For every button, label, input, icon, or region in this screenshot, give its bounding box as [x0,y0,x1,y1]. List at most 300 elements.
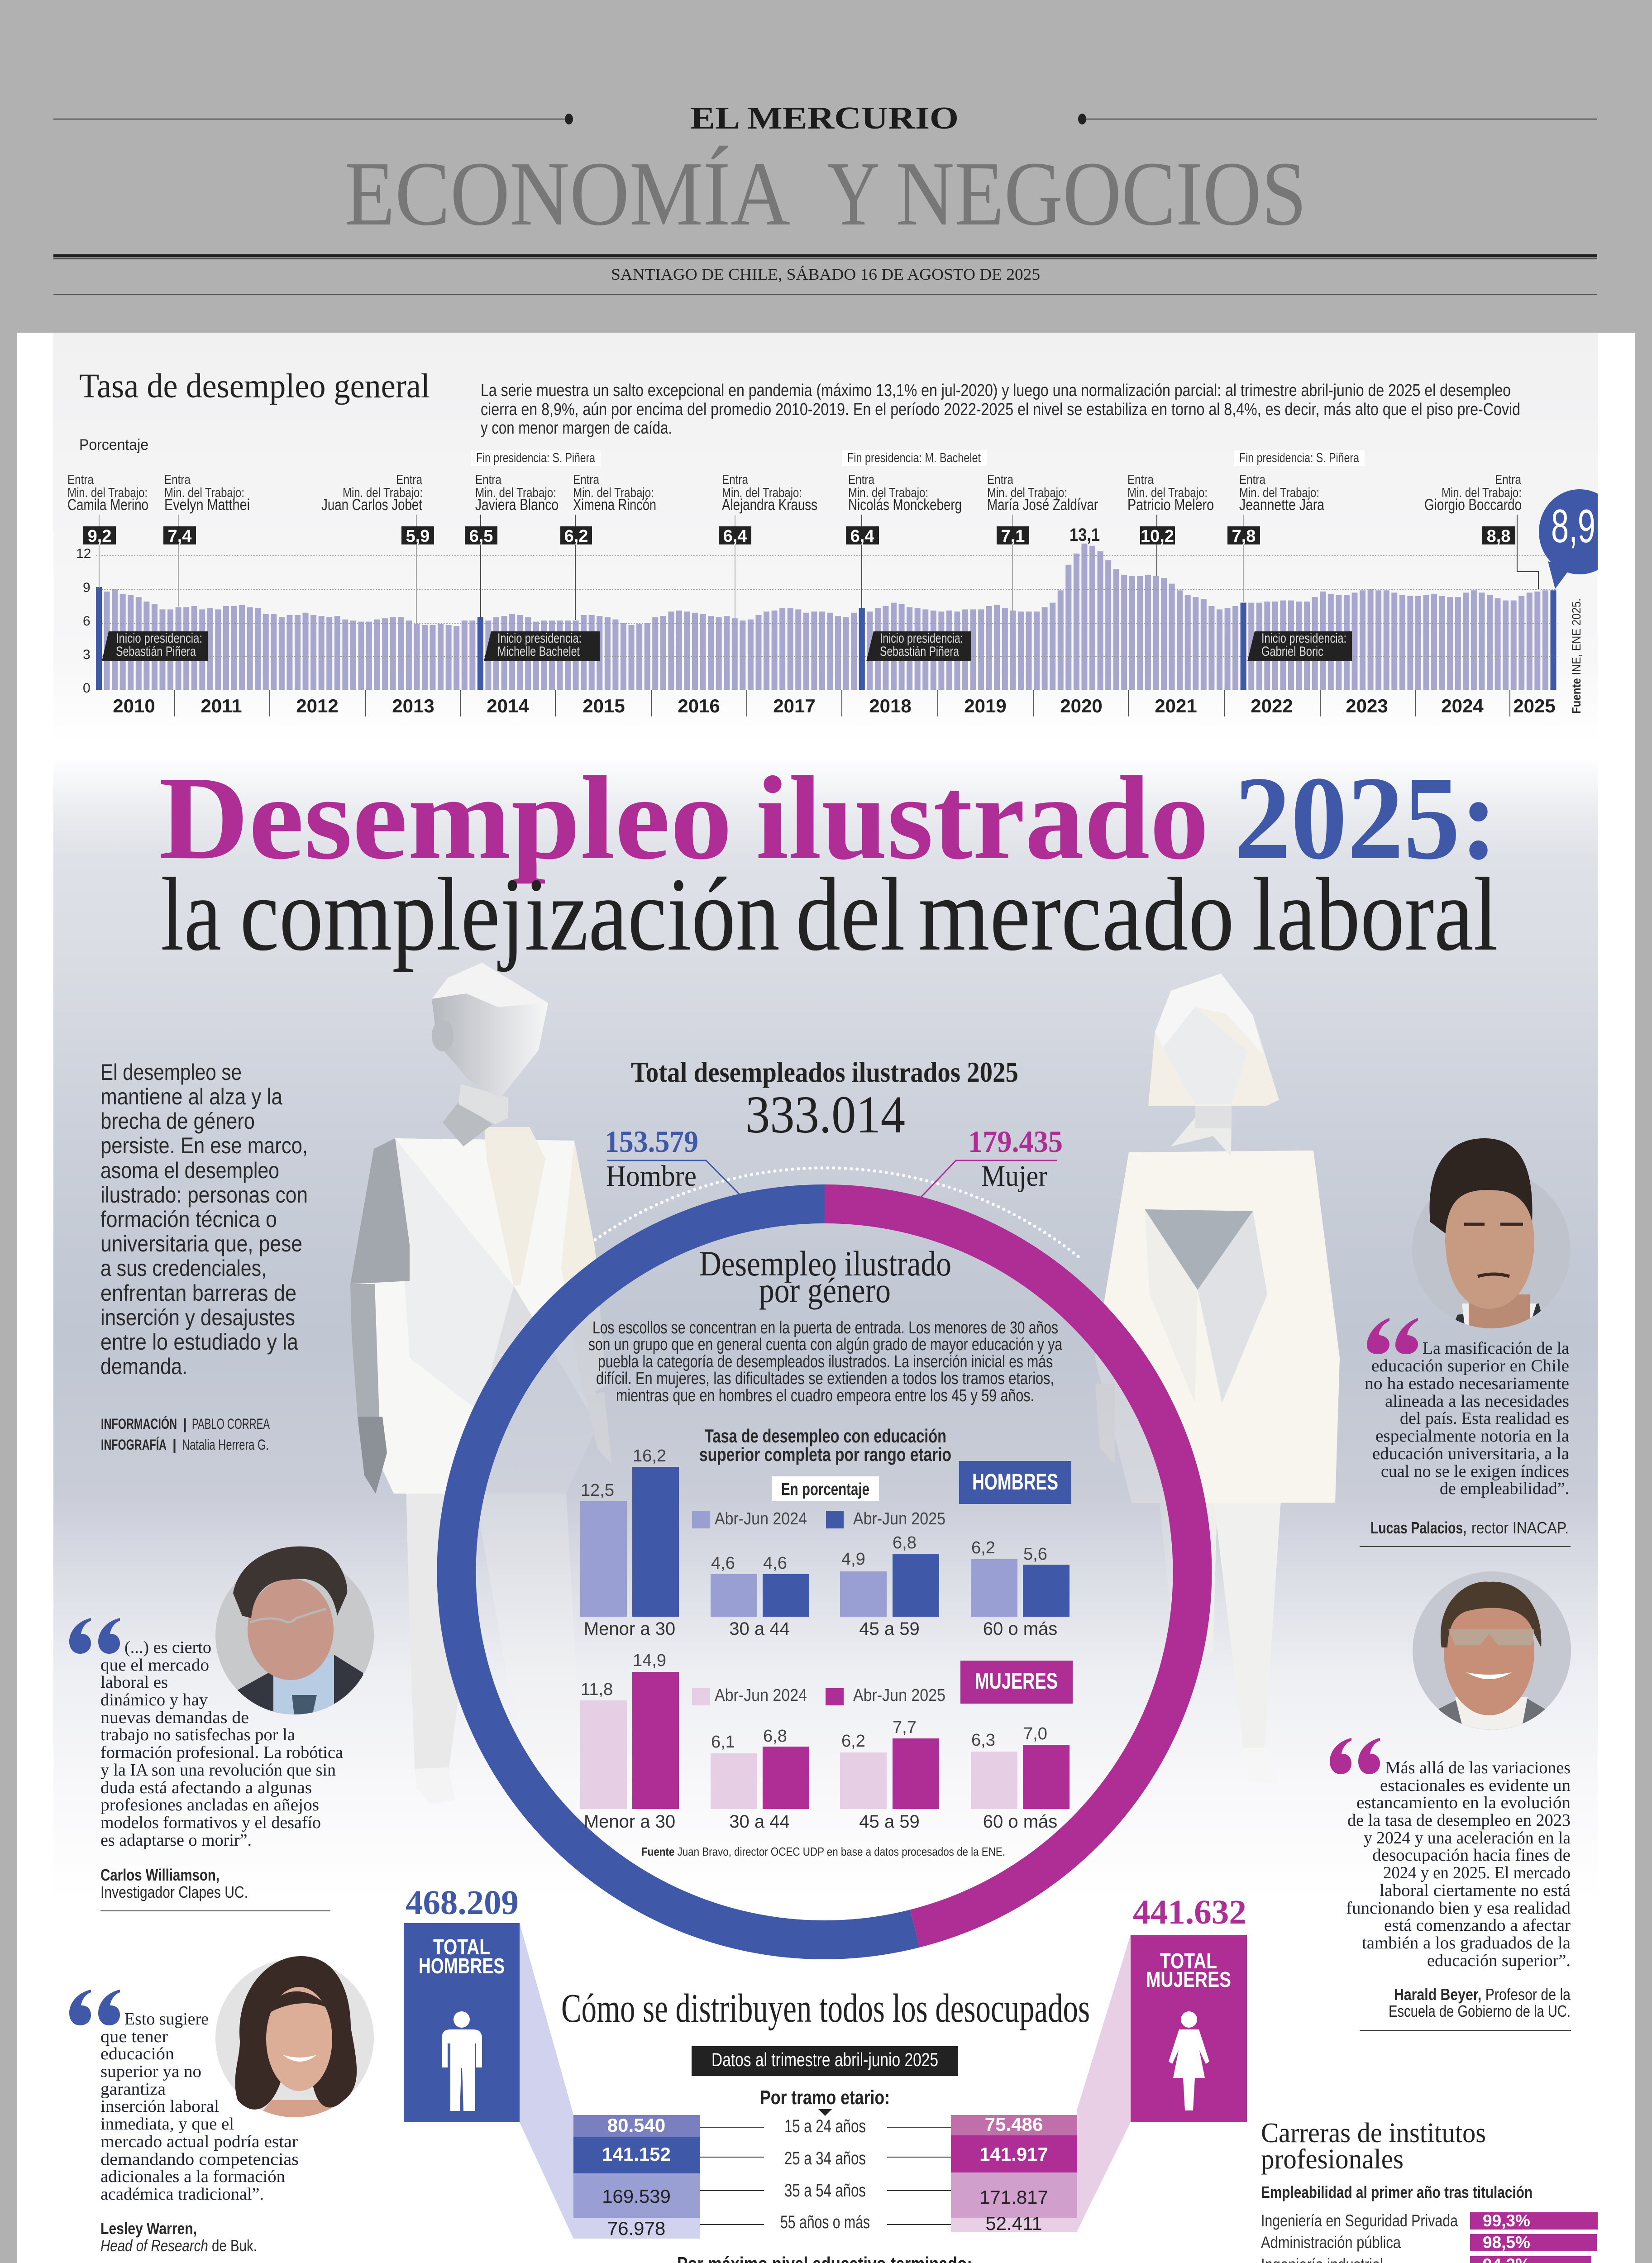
values [581,1447,1047,1573]
main subtitle: la [161,856,221,973]
value boxes: 10,2 [1141,527,1174,546]
heading: por género [759,1270,891,1310]
main subtitle: complejización [240,856,780,973]
quote text: Más allá de las variaciones [1385,1758,1571,1777]
presidency start tags [102,631,1352,661]
credits: | [183,1416,187,1432]
intro text [481,381,1520,438]
values: 6,3 [971,1731,995,1750]
value boxes: 6,5 [469,527,493,546]
quote text: mercado actual podría estar [100,2132,298,2151]
values: 4,9 [841,1550,865,1569]
attribution: Investigador Clapes UC. [100,1883,248,1901]
values [581,1651,1047,1752]
source: Fuente Juan Bravo, director OCEC UDP en base a datos procesados de la ENE. [641,1845,1005,1858]
ministers labels: Entra [475,473,502,487]
quote text: dinámico y hay [100,1690,208,1709]
presidency start tags: Inicio presidencia: [1261,631,1346,646]
year labels [113,695,1556,716]
callout: latest rate bubble: 8,9 [1551,500,1595,553]
text block: intro: ilustrado: personas con [100,1182,308,1208]
callout: hombres: Hombre [606,1160,697,1193]
attribution [100,1866,248,1901]
categories: 30 a 44 [729,1619,790,1639]
date tag [692,2046,958,2076]
icon: quote marks [69,1990,120,2025]
categories: 60 o más [983,1812,1057,1832]
quote text [1346,1758,1571,1970]
attribution: Lucas Palacios, [1370,1518,1466,1537]
credits: INFORMACIÓN [101,1416,177,1432]
quote text: laboral es [100,1673,168,1692]
value boxes: 9,2 [88,527,111,546]
values: 4,6 [763,1554,787,1573]
quote: Harald Beyer [1330,1571,1571,2030]
quote text: también a los graduados de la [1362,1934,1571,1953]
value boxes: 8,8 [1487,527,1510,546]
masthead rules [53,119,1597,294]
attribution: Harald Beyer, Profesor de la [1394,1985,1571,2004]
credits: Natalia Herrera G. [182,1437,269,1453]
man legs [406,1485,473,1774]
ministers labels: Giorgio Boccardo [1424,496,1522,514]
bars [580,1672,1070,1809]
categories: 30 a 44 [729,1812,790,1832]
categories: Menor a 30 [584,1619,675,1639]
values: 6,8 [763,1727,787,1746]
quote text: inserción laboral [100,2097,219,2116]
quote text: es adaptarse o morir”. [100,1831,252,1850]
axis labels: 12 [76,546,91,561]
woman collar [1171,1113,1232,1156]
presidency start tags: Gabriel Boric [1261,644,1323,659]
legend [692,1686,945,1705]
portrait [215,1547,374,1720]
ministers labels: Entra [1239,473,1266,487]
career labels [1261,2211,1458,2263]
quote text: 2024 y en 2025. El mercado [1383,1863,1571,1882]
text block: intro [100,1060,308,1379]
ring segment: mujeres [825,1204,1192,1929]
text block: intro: enfrentan barreras de [100,1280,296,1306]
legend: Abr-Jun 2024 [715,1509,807,1528]
source: Fuente INE, ENE 2025. [1570,598,1583,714]
paragraph: difícil. En mujeres, las dificultades se extienden a todos los tramos etarios, [596,1369,1054,1388]
end of presidency tags: Fin presidencia: S. Piñera [1239,451,1360,465]
portrait [1413,1571,1571,1733]
end of presidency tags: Fin presidencia: S. Piñera [476,451,596,465]
quote text: modelos formativos y el desafío [100,1813,321,1832]
values: 6,8 [893,1533,917,1552]
text block: intro: entre lo estudiado y la [100,1329,298,1355]
quote text: La masificación de la [1423,1339,1569,1358]
woman coat [1095,1151,1340,1503]
heading: profesionales [1261,2144,1404,2175]
panel background [53,333,1598,742]
bars [1470,2212,1598,2263]
attribution: rector INACAP. [1471,1518,1569,1537]
callout: mujeres: Mujer [981,1160,1047,1193]
year labels: 2022 [1251,695,1293,716]
ministers labels: Entra [722,473,749,487]
total hombres: 468.209 [406,1884,519,1922]
presidency start tags: Inicio presidencia: [880,631,963,646]
panel: main illustrated background [53,760,1598,1901]
quote text [100,1638,343,1850]
bars [580,1467,1070,1617]
text block: intro: demanda. [100,1354,187,1379]
quote text: laboral ciertamente no está [1380,1881,1571,1900]
axis labels: 6 [83,614,91,629]
text block: intro: inserción y desajustes [100,1305,295,1330]
values: 6,2 [971,1538,995,1557]
ring chart: desempleo ilustrado por género [456,1204,1192,1940]
total hombres: HOMBRES [419,1954,505,1978]
presidency start tags: Sebastián Piñera [116,644,196,659]
legend [692,1509,945,1528]
presidency start tags: Inicio presidencia: [497,631,582,646]
value boxes: 7,4 [168,527,191,546]
funnel: mujeres [1077,1935,1131,2231]
legend: Abr-Jun 2025 [853,1686,945,1705]
attribution [1389,1985,1571,2020]
bar chart: mujeres [580,1651,1073,1832]
category labels: 25 a 34 años [784,2148,866,2168]
ministers labels: Evelyn Matthei [164,496,250,514]
attribution [1370,1518,1569,1537]
heading: total desempleados ilustrados: 333.014 [745,1085,905,1144]
categories [584,1619,1057,1639]
main title: ilustrado [756,752,1209,884]
values: 5,6 [1023,1545,1047,1564]
subtitle: Empleabilidad al primer año tras titulación [1261,2183,1533,2201]
man arms [350,1138,410,1284]
heading: Desempleo ilustrado [699,1244,951,1283]
category labels: 35 a 54 años [784,2181,866,2201]
tag [959,1461,1071,1504]
values: 4,6 [711,1554,735,1573]
paragraph [588,1318,1063,1405]
quote text: del país. Esta realidad es [1400,1409,1569,1428]
total mujeres: TOTAL [1160,1949,1217,1973]
credits: | [172,1437,177,1453]
heading: total desempleados ilustrados [631,1056,1018,1144]
quote text: educación superior”. [1427,1951,1571,1970]
value boxes: 13,1 [1070,525,1100,545]
categories: 45 a 59 [859,1812,920,1832]
quote text: educación [100,2044,174,2063]
dateline: SANTIAGO DE CHILE, SÁBADO 16 DE AGOSTO DE 2025 [611,265,1040,283]
ministers labels: Entra [1127,473,1154,487]
attribution: Escuela de Gobierno de la UC. [1389,2002,1571,2020]
hombres stack: 169.539 [602,2186,671,2207]
intro text: y con menor margen de caída. [481,419,672,438]
ministers labels: Min. del Trabajo: [164,486,244,500]
callout: mujeres [912,1124,1063,1207]
credits: PABLO CORREA [192,1416,270,1432]
quote text: está comenzando a afectar [1384,1916,1571,1935]
values: 7,0 [1023,1724,1047,1743]
year labels: 2025 [1513,695,1556,716]
value boxes: 7,8 [1232,527,1256,546]
text block: intro: brecha de género [100,1108,255,1134]
year labels: 2015 [582,695,625,716]
ring interior veil [476,1223,1173,1920]
hombres stack: 141.152 [602,2144,671,2165]
ministers labels: Min. del Trabajo: [573,486,654,500]
man collar [443,1102,492,1146]
portrait [215,1956,374,2123]
man shirt [484,1127,545,1286]
value boxes: 6,4 [850,527,874,546]
quote: Carlos Williamson [69,1547,374,1911]
ministers labels: Min. del Trabajo: [987,486,1067,500]
year labels: 2011 [201,695,242,716]
ministers labels: Min. del Trabajo: [475,486,556,500]
dotted arc [595,1168,1080,1258]
quote text: educación superior en Chile [1371,1356,1569,1375]
icon: quote marks [1330,1738,1380,1774]
total mujeres: 441.632 [1133,1893,1246,1931]
axis labels: 0 [83,681,91,696]
heading: total desempleados ilustrados: Total desempleados ilustrados 2025 [631,1056,1018,1088]
icon: quote marks [69,1618,120,1654]
total mujeres: MUJERES [1146,1968,1231,1992]
category labels: 15 a 24 años [784,2116,866,2136]
callout: hombres: 153.579 [605,1124,698,1159]
total mujeres [1131,1893,1247,2122]
mujeres stack: 171.817 [979,2187,1048,2208]
categories: 60 o más [983,1619,1057,1639]
heading: Carreras de institutos [1261,2118,1486,2148]
values: 6,1 [711,1733,735,1752]
quote text: no ha estado necesariamente [1365,1374,1569,1393]
ministers labels: Entra [1495,473,1522,487]
mujeres stack: 52.411 [985,2213,1042,2234]
legend: Abr-Jun 2025 [853,1509,945,1528]
career labels: Ingeniería en Seguridad Privada [1261,2211,1458,2230]
icon: woman [1169,2011,1209,2110]
quote text: demandando competencias [100,2150,299,2169]
ministers labels: Min. del Trabajo: [722,486,802,500]
tag [960,1661,1073,1704]
categories: 45 a 59 [859,1619,920,1639]
panel: cómo se distribuyen [404,1884,1247,2263]
quote text [100,2010,299,2204]
chart title: superior completa por rango etario [699,1444,951,1465]
chart title: Tasa de desempleo con educación [705,1425,946,1447]
value boxes: 6,2 [564,527,588,546]
career labels: Administración pública [1261,2233,1401,2252]
year labels: 2017 [773,695,816,716]
quote text: cual no se le exigen índices [1381,1462,1569,1481]
section name: Y [827,143,880,244]
heading [1261,2118,1486,2175]
legend: Abr-Jun 2024 [715,1686,807,1705]
paragraph: son un grupo que en general cuenta con algún grado de mayor educación y ya [588,1335,1063,1354]
ring segment: hombres [456,1204,915,1940]
funnel: hombres [520,1923,573,2239]
main subtitle: del [796,856,905,973]
quote text: duda está afectando a algunas [100,1778,312,1797]
panel: tasa de desempleo general [53,333,1620,742]
year labels: 2010 [113,695,155,716]
block: por tramo etario [573,2086,1077,2239]
unit tag: En porcentaje [781,1480,869,1499]
ministers labels: Entra [573,473,600,487]
quote text: de empleabilidad”. [1440,1479,1569,1498]
hombres stack: 76.978 [607,2218,665,2239]
highlighted bars [99,587,1553,690]
values: 16,2 [633,1447,666,1466]
chart: carreras de institutos profesionales [1261,2118,1598,2263]
quote text: de la tasa de desempleo en 2023 [1347,1811,1571,1830]
ministers labels: Entra [848,473,875,487]
section name: ECONOMÍA [344,143,790,244]
ministers labels: Jeannette Jara [1239,496,1324,514]
credits [101,1416,270,1453]
category labels: 55 años o más [780,2212,870,2232]
text block: intro: formación técnica o [100,1207,277,1232]
text block: intro: mantiene al alza y la [100,1084,282,1109]
ministers labels: Min. del Trabajo: [1239,486,1319,500]
year labels: 2019 [964,695,1007,716]
newspaper name: EL MERCURIO [690,101,959,136]
text block: intro: asoma el desempleo [100,1158,279,1183]
year labels: 2018 [869,695,912,716]
ministers labels: Alejandra Krauss [722,496,817,514]
year labels: 2024 [1441,695,1484,716]
end of presidency tags: Fin presidencia: M. Bachelet [847,451,981,465]
category labels [780,2116,870,2232]
end of presidency tags [471,450,1365,466]
values: 11,8 [581,1680,613,1699]
figure: origami man [350,963,612,1804]
categories [584,1812,1057,1832]
quote text: que el mercado [100,1656,209,1675]
masthead [53,101,1597,294]
value boxes: 5,9 [406,527,430,546]
year ticks [175,690,1510,716]
ministers labels: María José Zaldívar [987,496,1098,514]
quote text: académica tradicional”. [100,2185,264,2204]
unit tag [772,1476,879,1501]
panel: inside ring [580,1244,1073,1858]
mujeres stack: 141.917 [979,2144,1048,2165]
value boxes: 7,1 [1001,527,1025,546]
text block: intro: persiste. En ese marco, [100,1133,308,1158]
values [1483,2211,1577,2263]
quote text: alineada a las necesidades [1385,1392,1569,1411]
total hombres: TOTAL [433,1935,490,1959]
icon: man [442,2011,482,2111]
man head [432,963,548,1098]
presidency start tags: Sebastián Piñera [880,644,959,659]
block: por tramo etario: Por tramo etario: [760,2086,890,2109]
quote text: estacionales es evidente un [1380,1776,1571,1795]
year labels: 2013 [392,695,434,716]
marker lines [99,515,1538,625]
section name [344,143,1307,244]
year labels: 2014 [487,695,529,716]
bar chart: monthly unemployment [76,515,1557,716]
ministers labels: Min. del Trabajo: [343,486,423,500]
main title: 2025: [1234,752,1498,884]
text block: intro: universitaria que, pese [100,1231,302,1256]
section name: NEGOCIOS [896,143,1307,244]
main subtitle [161,856,1498,973]
quote text: y la IA son una revolución que sin [100,1761,336,1780]
figure: origami woman [1095,974,1340,1785]
heading: Cómo se distribuyen todos los desocupados [561,1986,1090,2031]
callout: mujeres: 179.435 [968,1124,1063,1159]
quote text [1365,1339,1569,1498]
year labels: 2020 [1060,695,1103,716]
ministers labels [67,473,1522,514]
ministers labels: Entra [987,473,1014,487]
attribution [100,2219,257,2255]
paragraph: Los escollos se concentran en la puerta de entrada. Los menores de 30 años [592,1318,1058,1337]
quote text: Esto sugiere [124,2010,209,2029]
quote text: educación universitaria, a la [1372,1444,1569,1463]
main subtitle: mercado [918,856,1234,973]
axis labels [76,546,91,696]
credits: INFOGRAFÍA [101,1437,167,1453]
text block: intro: a sus credenciales, [100,1256,267,1281]
text block: intro: El desempleo se [100,1060,242,1085]
ministers labels: Entra [67,473,94,487]
ministers labels: Juan Carlos Jobet [321,496,422,514]
woman hair [1148,974,1279,1106]
ministers labels: Ximena Rincón [573,496,656,514]
main subtitle: laboral [1252,856,1498,973]
monthly bars [99,544,1553,690]
quote text: formación profesional. La robótica [100,1743,343,1762]
attribution: Head of Research de Buk. [100,2236,257,2255]
bar chart: hombres [580,1447,1071,1639]
ministers labels: Min. del Trabajo: [1127,486,1208,500]
quote text: estancamiento en la evolución [1356,1793,1571,1812]
quote: Lesley Warren [69,1956,374,2263]
ministers labels: Javiera Blanco [475,496,559,514]
main title [159,752,1498,884]
quote text: y 2024 y una aceleración en la [1364,1829,1571,1848]
ministers labels: Camila Merino [67,496,148,514]
axis labels: 3 [83,647,91,662]
tag: MUJERES [975,1668,1058,1694]
portrait [1412,1138,1571,1340]
quote text: nuevas demandas de [100,1708,249,1727]
chart title [699,1425,951,1465]
masthead dots [565,114,1086,124]
icon: quote marks [1367,1318,1418,1354]
year labels: 2012 [296,695,339,716]
values: 14,9 [633,1651,666,1670]
year labels: 2023 [1346,695,1388,716]
categories: Menor a 30 [584,1812,675,1832]
heading [699,1244,951,1310]
hombres stack: 80.540 [607,2115,665,2136]
values: 7,7 [893,1718,917,1737]
ministers labels: Entra [396,473,423,487]
unit label: Porcentaje [79,436,148,454]
man jacket [350,1138,597,1494]
quote text: trabajo no satisfechas por la [100,1725,295,1744]
quote text: desocupación hacia fines de [1372,1846,1571,1865]
year labels: 2016 [678,695,720,716]
year labels: 2021 [1155,695,1197,716]
ministers labels: Nicolás Monckeberg [848,496,962,514]
